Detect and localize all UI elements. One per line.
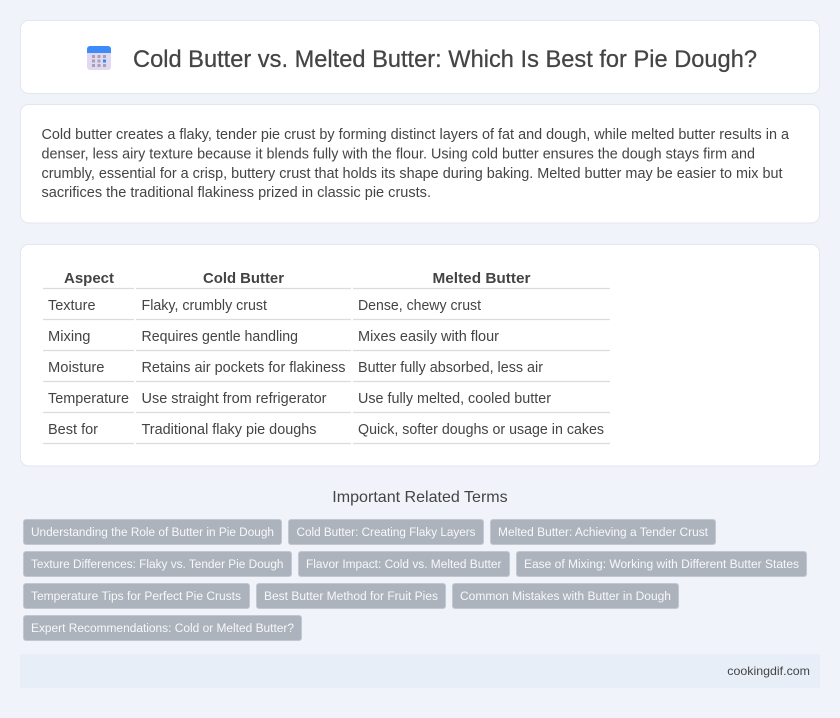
tag: Melted Butter: Achieving a Tender Crust [498, 525, 709, 539]
summary text: sacrifices the traditional flakiness prized in classic pie crusts. [42, 185, 431, 201]
table row: best for: Traditional flaky pie doughs [142, 422, 316, 438]
table row: texture: Flaky, crumbly crust [142, 298, 267, 314]
tag: Understanding the Role of Butter in Pie Dough [31, 525, 274, 539]
tag: Ease of Mixing: Working with Different Butter States [524, 557, 799, 571]
table row: best for: Best for [48, 422, 98, 438]
tag [24, 520, 282, 544]
table row: best for: Quick, softer doughs or usage in cakes [358, 422, 604, 438]
tag [516, 552, 806, 576]
footer [20, 654, 820, 688]
tag [256, 584, 446, 608]
table row: temperature: Temperature [48, 391, 129, 407]
tag [24, 552, 292, 576]
table row: moisture [48, 360, 543, 376]
table header row: Cold Butter [203, 270, 284, 287]
summary text: denser, less airy texture because it blends fully with the flour. Using cold butter ensures the dough stays firm and [42, 146, 755, 162]
tag: Texture Differences: Flaky vs. Tender Pie Dough [31, 557, 284, 571]
footer source text: cookingdif.com [727, 664, 810, 678]
summary text: crumbly, essential for a crisp, buttery crust that holds its shape during baking. Melted butter may be easier to mix but [42, 166, 782, 182]
tag [298, 552, 510, 576]
table row: texture [48, 298, 481, 314]
table row: texture: Texture [48, 298, 96, 314]
title: Cold Butter vs. Melted Butter: Which Is Best for Pie Dough? [133, 47, 757, 73]
summary text [42, 127, 790, 201]
table row: mixing: Mixes easily with flour [358, 329, 499, 345]
table row: mixing: Requires gentle handling [142, 329, 298, 345]
table header row: Aspect [64, 270, 114, 287]
summary text: Cold butter creates a flaky, tender pie crust by forming distinct layers of fat and dough, while melted butter results in a [42, 127, 790, 143]
tag: Best Butter Method for Fruit Pies [264, 589, 438, 603]
tag [490, 520, 716, 544]
tag: Common Mistakes with Butter in Dough [460, 589, 671, 603]
panel: summary paragraph [20, 104, 820, 223]
related term tags [24, 520, 806, 640]
table row: mixing: Mixing [48, 329, 91, 345]
icon: calendar [87, 46, 111, 70]
table row: best for [48, 422, 604, 438]
tag: Cold Butter: Creating Flaky Layers [296, 525, 476, 539]
table row: temperature: Use fully melted, cooled butter [358, 391, 551, 407]
tag [24, 616, 302, 640]
table row: texture: Dense, chewy crust [358, 298, 481, 314]
table row: moisture: Butter fully absorbed, less air [358, 360, 543, 376]
tag [288, 520, 484, 544]
panel: comparison table [20, 244, 820, 466]
table header row: Melted Butter [432, 270, 531, 287]
table row: moisture: Moisture [48, 360, 105, 376]
table row: temperature [48, 391, 551, 407]
table row: mixing [48, 329, 499, 345]
tag [24, 584, 250, 608]
table header row [64, 270, 531, 287]
panel: header [20, 20, 820, 94]
heading: important related terms: Important Related Terms [332, 489, 508, 506]
tag: Temperature Tips for Perfect Pie Crusts [31, 589, 241, 603]
tag: Flavor Impact: Cold vs. Melted Butter [306, 557, 502, 571]
tag [452, 584, 678, 608]
tag: Expert Recommendations: Cold or Melted Butter? [31, 621, 294, 635]
table row: temperature: Use straight from refrigerator [142, 391, 327, 407]
table row: moisture: Retains air pockets for flakiness [142, 360, 346, 376]
